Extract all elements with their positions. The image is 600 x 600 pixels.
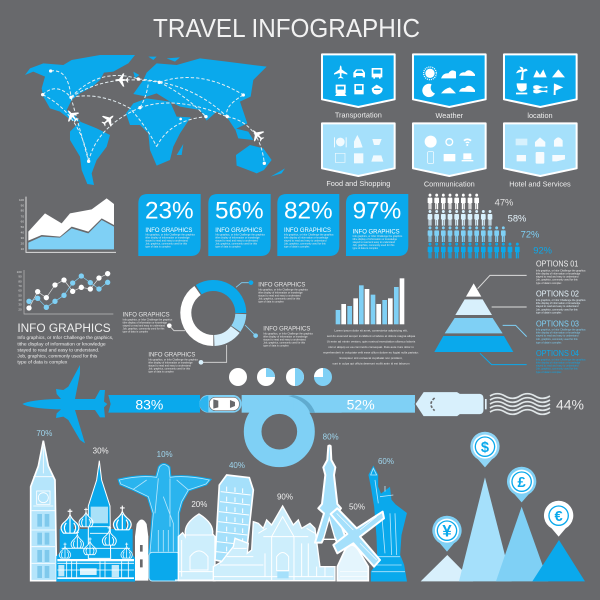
landmark percent labels left: 90% — [277, 492, 293, 501]
communication icons — [425, 136, 473, 163]
dollar pin — [470, 432, 500, 467]
panel shapes dark row — [322, 54, 577, 107]
landmark percent labels left: 30% — [93, 447, 109, 456]
donut label top right: Info graphics, or Infor Challenge the graphics — [258, 288, 309, 291]
location icons — [516, 67, 565, 95]
stat card 23%: INFO GRAPHICS — [145, 227, 193, 234]
area chart: 50 — [21, 225, 24, 229]
donut label top right: INFO GRAPHICS — [258, 281, 306, 288]
landmark percent labels left: 70% — [36, 429, 52, 438]
donut label bottom: tithe display of information or knowledge — [148, 362, 193, 365]
euro pin — [544, 501, 573, 537]
stat card 97%: type of data is complex — [353, 247, 379, 250]
planes on map — [63, 73, 267, 144]
line chart: 70 — [18, 284, 22, 288]
donut label left: INFO GRAPHICS — [123, 311, 170, 318]
donut label right: stayed to read and easy to understand — [263, 338, 306, 341]
people percentages: 47% — [495, 198, 513, 208]
donut label right: Job, graphics, commonly used for this — [263, 341, 306, 344]
left and centre charts, cards and donut — [17, 194, 408, 374]
info graphics text block: Info graphics, or Infor Challenge the graphics, — [17, 335, 113, 340]
big ben — [31, 441, 57, 581]
transport bar and landmarks right — [288, 392, 585, 581]
flight routes — [43, 71, 264, 163]
option 03: stayed to read and easy to understand — [536, 335, 579, 338]
option 01: tithe display of information or knowledge — [536, 272, 581, 275]
pie 3 — [286, 368, 304, 386]
stat card 23%: type of data is complex — [145, 246, 171, 249]
yen pin — [432, 516, 462, 552]
fold shadow and light bar — [288, 395, 415, 413]
people percentages — [495, 198, 552, 255]
option 02: tithe display of information or knowledge — [536, 302, 581, 305]
panel shapes light row — [322, 123, 577, 176]
stat card 56%: 56% — [215, 197, 264, 224]
option 03: Job, graphics, commonly used for this — [536, 338, 578, 341]
area chart — [19, 197, 116, 252]
line chart — [17, 270, 113, 314]
option 04: type of data is complex — [536, 371, 562, 374]
donut label left: Info graphics, or Infor Challenge the graphics — [123, 318, 173, 321]
donut label right: Info graphics, or Infor Challenge the graphics — [263, 332, 314, 335]
83 percent: 83% — [135, 396, 163, 412]
donut label left: tithe display of information or knowledge — [123, 321, 168, 324]
area chart: 80 — [21, 209, 24, 213]
donut label top right: type of data is complex — [258, 300, 284, 303]
landmark percent labels right: 80% — [323, 432, 339, 441]
windmill — [331, 508, 384, 581]
dollar pin: $ — [481, 440, 489, 456]
area chart: 40 — [21, 231, 24, 235]
option 01: OPTIONS 01 — [536, 259, 579, 269]
panel labels: Transportation — [335, 110, 382, 119]
info graphics text block: Job, graphics, commonly used for this — [17, 353, 97, 358]
option 03 — [536, 318, 586, 344]
stat card 82%: 82% — [284, 197, 333, 224]
pyramid — [434, 275, 527, 365]
line chart: 20 — [18, 307, 22, 311]
pound pin — [507, 467, 536, 502]
airplane — [22, 365, 107, 443]
option 04: tithe display of information or knowledge — [536, 361, 581, 364]
stat card 97%: Job, graphics, commonly used for this — [353, 244, 395, 247]
landmark percent labels left: 20% — [191, 500, 207, 509]
pie 1 — [229, 368, 247, 386]
line chart: 30 — [18, 303, 22, 307]
option 02: Info graphics, or Infor Challenge the graphics — [536, 299, 586, 302]
option 01: type of data is complex — [536, 282, 562, 285]
donut label right: INFO GRAPHICS — [263, 325, 311, 332]
icon panels — [322, 54, 577, 189]
option 02: type of data is complex — [536, 312, 562, 315]
pie 2 — [257, 368, 275, 386]
option 02 — [536, 289, 586, 315]
panel labels: Hotel and Services — [509, 180, 571, 189]
panel labels: Communication — [424, 180, 475, 189]
panel labels — [326, 110, 571, 189]
area chart: 30 — [21, 236, 24, 240]
stat card 97%: stayed to read and easy to understand — [353, 241, 396, 244]
stat card 23%: 23% — [145, 197, 194, 224]
stat card 23%: Info graphics, or Infor Challenge the graphics — [145, 234, 196, 237]
panel labels: location — [527, 111, 553, 120]
donut label bottom: type of data is complex — [148, 371, 174, 374]
donut label top right: Job, graphics, commonly used for this — [258, 297, 301, 300]
donut label right — [263, 325, 314, 347]
line chart: 90 — [18, 275, 22, 279]
option 02: stayed to read and easy to understand — [536, 305, 579, 308]
bar chart caption: sed do eiusmod tempor incididunt ut labore et dolore magna aliqua — [327, 334, 415, 338]
stat card 23%: stayed to read and easy to understand — [145, 240, 188, 243]
people 58% — [428, 210, 492, 226]
donut label bottom: stayed to read and easy to understand — [148, 365, 191, 368]
line chart: 60 — [18, 289, 22, 293]
option 03: tithe display of information or knowledge — [536, 332, 581, 335]
bar chart caption: Ut enim ad minim veniam, quis nostrud exercitation ullamco laboris — [327, 340, 416, 344]
option 01: stayed to read and easy to understand — [536, 275, 579, 278]
stat card 56%: stayed to read and easy to understand — [215, 240, 258, 243]
stat card 82%: stayed to read and easy to understand — [284, 240, 327, 243]
pie row — [229, 368, 332, 386]
info graphics text block — [17, 321, 113, 364]
donut label left: Job, graphics, commonly used for this — [123, 327, 165, 330]
pie 4 — [314, 368, 332, 386]
yen pin: ¥ — [442, 522, 452, 541]
landmark percent labels right: 60% — [378, 457, 394, 466]
option 03: type of data is complex — [536, 341, 562, 344]
bar chart caption — [323, 328, 419, 366]
people percentages: 72% — [521, 229, 539, 239]
option 01: Info graphics, or Infor Challenge the graphics — [536, 269, 586, 272]
52 percent: 52% — [347, 396, 375, 412]
blue bar — [108, 395, 200, 413]
stat card 23% — [138, 194, 201, 256]
option 01 — [536, 259, 586, 285]
stat card 97%: Info graphics, or Infor Challenge the graphics — [353, 235, 403, 238]
stat card 82% — [277, 194, 339, 256]
people 72% — [428, 226, 506, 242]
right column charts — [323, 194, 586, 374]
stat card 23%: Job, graphics, commonly used for this — [145, 243, 188, 246]
info graphics text block: tithe display of information or knowledge — [17, 341, 106, 346]
option 01: Job, graphics, commonly used for this — [536, 279, 578, 282]
eiffel tower — [315, 445, 347, 543]
stat card 56%: Job, graphics, commonly used for this — [215, 243, 258, 246]
transport bar and landmarks left — [22, 365, 342, 581]
bar chart caption: reprehenderit in voluptate velit esse cillum dolore eu fugiat nulla pariatur. — [323, 351, 419, 355]
option 04: Job, graphics, commonly used for this — [536, 368, 578, 371]
option 04 — [536, 348, 586, 374]
bar chart caption: Lorem ipsum dolor sit amet, consectetur adipisicing elit, — [334, 328, 408, 332]
line chart: 40 — [18, 298, 22, 302]
bar chart — [336, 278, 404, 324]
area chart: 20 — [21, 241, 24, 245]
info graphics text block: type of data is complex — [17, 359, 68, 364]
weather icons — [422, 67, 475, 97]
area chart: 100 — [19, 198, 24, 202]
stat card 56%: INFO GRAPHICS — [215, 227, 263, 234]
option 03: OPTIONS 03 — [536, 318, 579, 328]
stat card 82%: Info graphics, or Infor Challenge the graphics — [284, 234, 334, 237]
donut label top right — [258, 281, 309, 303]
panel labels: Weather — [436, 111, 464, 120]
donut chart — [186, 285, 241, 340]
thai pavilion — [213, 506, 335, 581]
stat card 97%: tithe display of information or knowledge — [353, 238, 398, 241]
wave icon — [490, 394, 550, 414]
stat card 82%: type of data is complex — [284, 246, 310, 249]
stat card 82%: tithe display of information or knowledge — [284, 237, 329, 240]
hotel and services icons — [516, 137, 565, 164]
stat card 82%: Job, graphics, commonly used for this — [284, 243, 326, 246]
44 percent: 44% — [556, 396, 584, 412]
option 02: Job, graphics, commonly used for this — [536, 308, 578, 311]
stat card 82%: INFO GRAPHICS — [284, 227, 331, 234]
food and shopping icons — [334, 135, 383, 163]
route nodes — [41, 69, 266, 165]
leaning tower of pisa — [215, 475, 253, 567]
people percentages: 92% — [533, 245, 552, 255]
light ring — [242, 395, 342, 458]
landmark percent labels left: 40% — [229, 461, 245, 470]
stat card 23%: tithe display of information or knowledge — [145, 237, 190, 240]
panel labels: Food and Shopping — [326, 179, 390, 188]
christ the redeemer — [119, 464, 209, 581]
area chart: 60 — [21, 220, 24, 224]
donut leaders — [167, 280, 258, 365]
pound pin: £ — [518, 475, 526, 491]
donut label bottom: INFO GRAPHICS — [148, 352, 196, 359]
taj mahal — [175, 514, 215, 581]
bar chart caption: Excepteur sint occaecat cupidatat non proident, — [340, 356, 403, 360]
donut label bottom: Job, graphics, commonly used for this — [148, 368, 191, 371]
info graphics text block: INFO GRAPHICS — [17, 321, 111, 335]
donut label right: type of data is complex — [263, 344, 289, 347]
line chart: 80 — [18, 279, 22, 283]
donut label top right: tithe display of information or knowledge — [258, 291, 303, 294]
option 03: Info graphics, or Infor Challenge the graphics — [536, 329, 586, 332]
st basil's cathedral — [57, 461, 134, 581]
landmark percent labels right — [323, 432, 394, 512]
transportation icons — [334, 65, 383, 96]
bar chart caption: nisi ut aliquip ex ea commodo consequat. Duis aute irure dolor in — [328, 345, 414, 349]
line chart: 50 — [18, 293, 22, 297]
stat card 97% — [346, 194, 408, 256]
euro pin: € — [555, 509, 563, 525]
area chart: 10 — [21, 247, 24, 251]
stat card 56% — [208, 194, 271, 256]
area chart: 70 — [21, 214, 24, 218]
donut label right: tithe display of information or knowledge — [263, 335, 308, 338]
mountain chart — [421, 477, 585, 581]
option 02: OPTIONS 02 — [536, 289, 579, 299]
option 04: Info graphics, or Infor Challenge the graphics — [536, 358, 586, 361]
people 92% — [428, 243, 520, 258]
option 04: OPTIONS 04 — [536, 348, 579, 358]
stat card 97%: INFO GRAPHICS — [353, 228, 400, 235]
donut label left: type of data is complex — [123, 330, 149, 333]
stat card 56%: tithe display of information or knowledge — [215, 237, 260, 240]
line chart: 100 — [17, 270, 22, 274]
landmark percent labels left — [36, 429, 293, 509]
option 04: stayed to read and easy to understand — [536, 364, 579, 367]
info graphics text block: stayed to read and easy to understand. — [17, 348, 99, 353]
donut label bottom — [148, 352, 199, 374]
bar chart caption: sunt in culpa qui officia deserunt mollit anim id est laborum — [332, 362, 410, 366]
train — [415, 392, 487, 417]
stat card 56%: Info graphics, or Infor Challenge the graphics — [215, 234, 266, 237]
stat card 56%: type of data is complex — [215, 246, 241, 249]
donut label left — [123, 311, 173, 333]
area chart: 90 — [21, 203, 24, 207]
people 47% — [428, 194, 479, 209]
people percentages: 58% — [508, 214, 526, 224]
donut label left: stayed to read and easy to understand — [123, 324, 166, 327]
donut label bottom: Info graphics, or Infor Challenge the graphics — [148, 359, 199, 362]
small tower — [135, 519, 148, 581]
options list — [536, 259, 586, 374]
world map with flight routes — [25, 55, 285, 185]
statue of liberty — [369, 467, 406, 581]
donut label top right: stayed to read and easy to understand — [258, 294, 301, 297]
map landmasses — [25, 55, 285, 185]
car — [199, 395, 242, 413]
landmark percent labels right: 50% — [349, 503, 365, 512]
landmark percent labels left: 10% — [157, 450, 173, 459]
stat card 97%: 97% — [353, 197, 401, 224]
title: TRAVEL INFOGRAPHIC — [153, 13, 420, 43]
people rows — [428, 194, 520, 258]
